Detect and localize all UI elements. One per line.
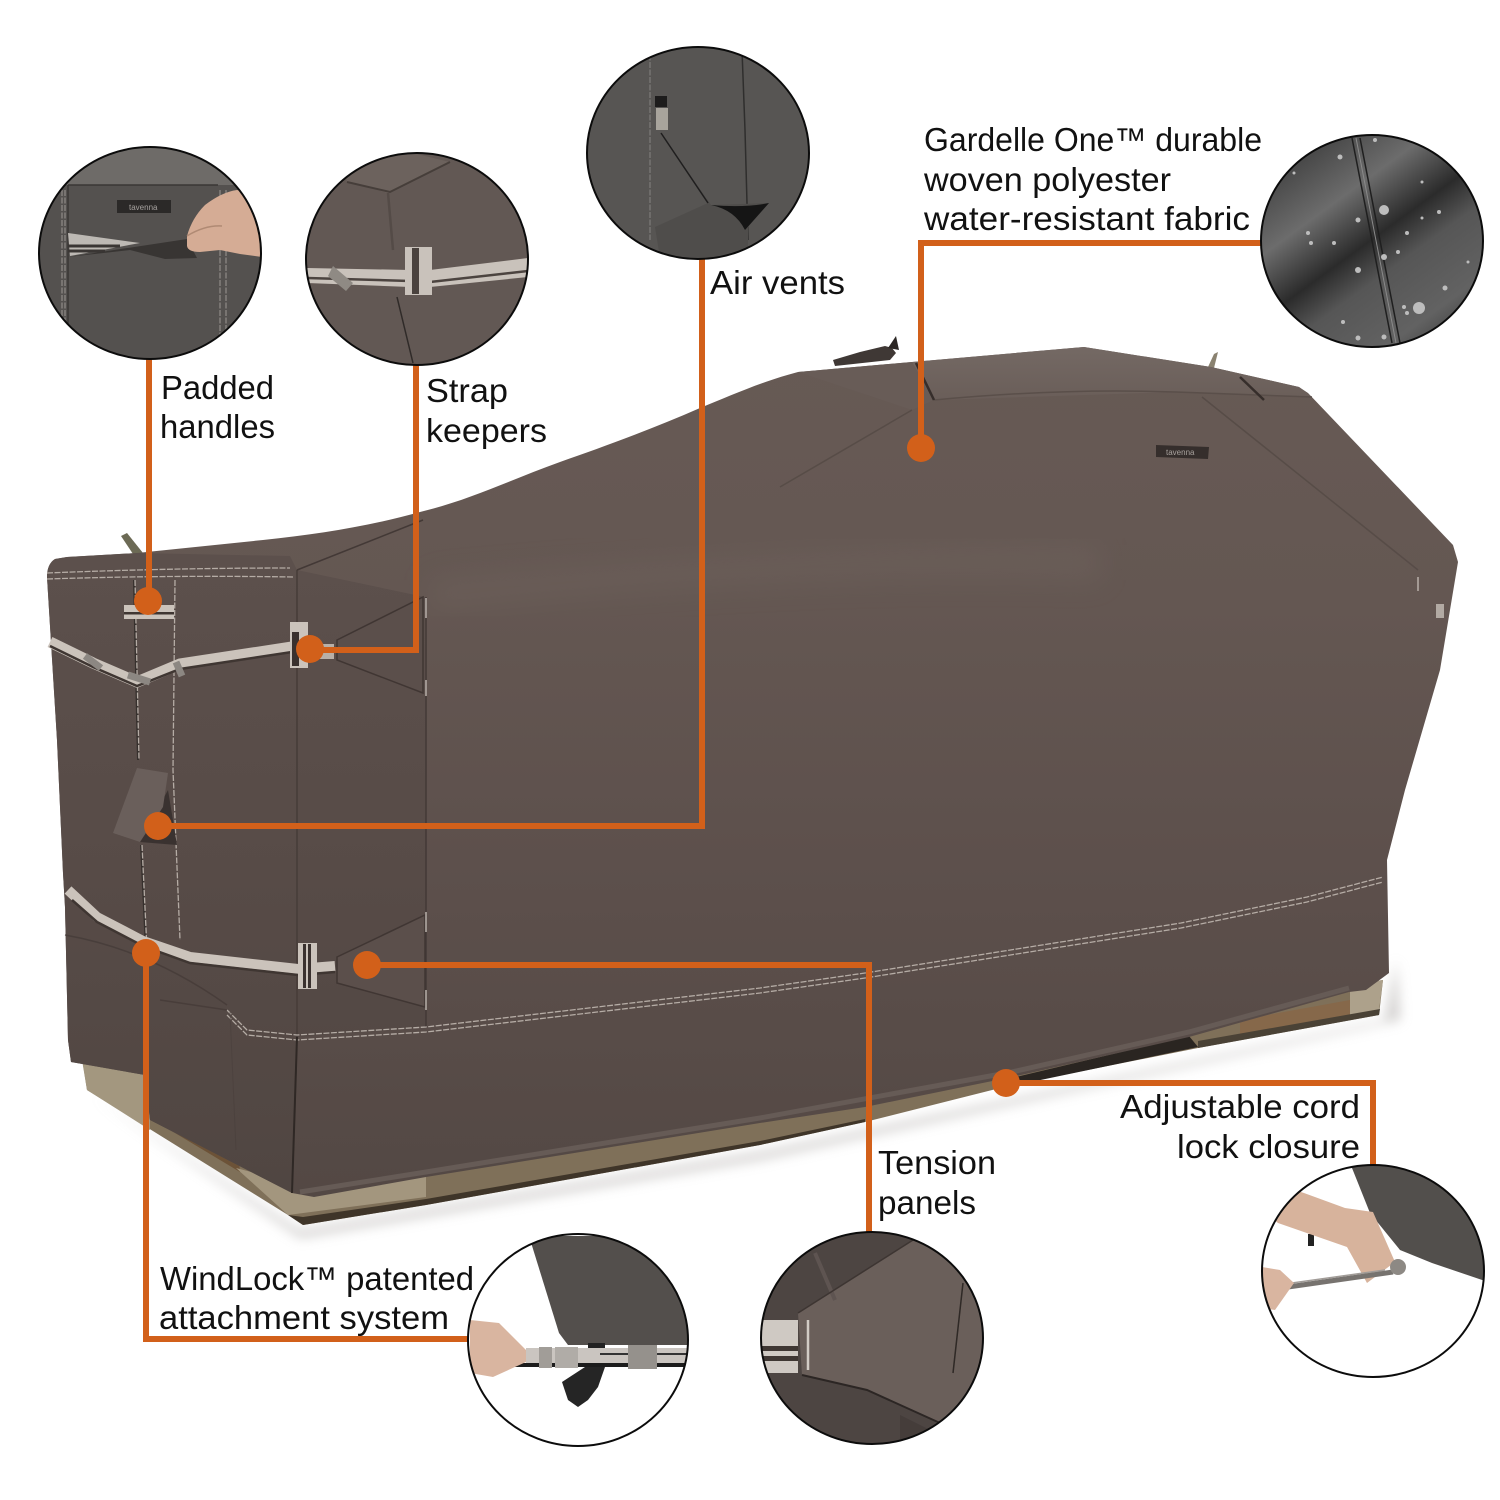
label: fabric [923,121,1262,237]
marker: windlock [132,939,160,967]
label: tension panels: Tension [878,1144,996,1181]
marker: padded handles [134,587,162,615]
label: windlock [159,1260,474,1336]
label: fabric: Gardelle One™ durable [924,121,1262,158]
right side buckle and seam [1417,577,1419,591]
end seams [134,580,146,950]
marker: tension panels [353,951,381,979]
air vent flap [140,790,177,845]
label: cord lock closure: lock closure [1177,1128,1360,1165]
handle strap [124,605,174,619]
detail circle: strap keepers [303,150,531,370]
upper strap [50,642,292,682]
label: strap keepers: Strap [426,372,508,409]
detail circle: tension panel [758,1230,990,1446]
label: padded handles: Padded [161,369,274,406]
label: tension panels: panels [878,1184,976,1221]
lower strap [68,890,335,969]
detail circle: padded handles: tavenna [129,203,158,212]
end panel [47,553,426,1193]
ground shadow [92,960,1400,1238]
label: cord lock closure [1120,1088,1360,1165]
detail circle: padded handles [36,145,264,365]
label: fabric: woven polyester [923,161,1171,198]
marker: air vents [144,812,172,840]
product: covered grill island [47,336,1458,1238]
upper keeper [290,622,308,668]
label: windlock: attachment system [159,1299,449,1336]
marker: cord lock [992,1069,1020,1097]
label: strap keepers: keepers [426,412,547,449]
brand label [1156,445,1209,459]
label: padded handles [160,369,275,445]
label: tension panels [878,1144,996,1221]
hem stitching [227,877,1383,1035]
label: strap keepers [426,372,547,449]
label: fabric: water-resistant fabric [923,200,1250,237]
wooden base [82,980,1383,1225]
label: padded handles: handles [160,408,275,445]
callout lines [146,243,1373,1339]
detail circle: water-resistant fabric [1258,133,1488,351]
cover body [47,347,1458,1197]
top panel [912,347,1312,400]
frayed bottom hem [300,988,1349,1192]
highlight across front panel [430,545,1100,610]
label: windlock: WindLock™ patented [160,1260,474,1297]
top buckle hardware [833,346,896,366]
marker: fabric [907,434,935,462]
detail circle: WindLock attachment [465,1232,691,1448]
tension panels [337,597,423,693]
label: cord lock closure: Adjustable cord [1120,1088,1360,1125]
detail circle: air vents [585,45,813,265]
detail circle: cord lock closure [1260,1163,1488,1379]
product: covered grill island: tavenna [1166,448,1195,457]
label: air vents: Air vents [710,264,845,301]
marker: strap keepers [296,635,324,663]
handle sticking out behind cover [121,533,143,554]
